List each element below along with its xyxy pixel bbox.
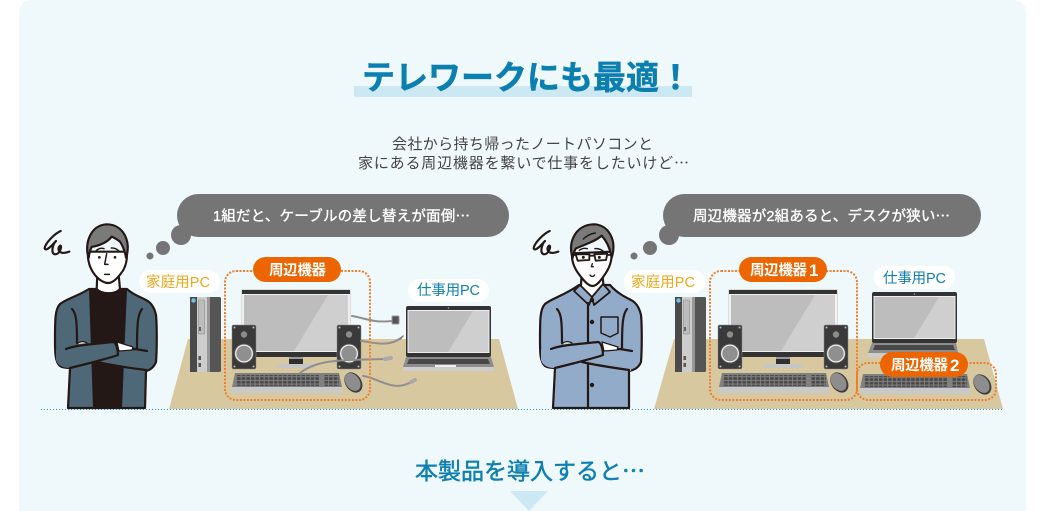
dashed outline: peripherals 1 (710, 271, 857, 400)
crossed arms (56, 309, 147, 371)
arrow: down (510, 491, 548, 511)
label: work PC right: 仕事用PC (883, 270, 946, 287)
collar (574, 284, 610, 305)
label: home PC right: 家庭用PC (631, 274, 695, 291)
dashed outline: peripherals 2 (857, 363, 996, 400)
label: work PC left (408, 279, 489, 302)
label: peripherals (253, 257, 341, 282)
desk: right (654, 339, 1003, 409)
buttons (590, 298, 594, 387)
title: テレワークにも最適！ (362, 59, 692, 96)
label: peripherals 2 (880, 352, 968, 377)
label: peripherals 2: 2 (950, 356, 959, 375)
monitor (728, 289, 838, 368)
laptop: left (403, 306, 494, 371)
speakers (718, 325, 742, 369)
keyboard (232, 373, 342, 393)
speakers (232, 325, 256, 369)
peripherals group 1: right (718, 289, 852, 396)
inner shirt (89, 289, 127, 408)
thought bubble: right (630, 194, 981, 260)
worry scribble (45, 231, 69, 254)
floor line (41, 408, 1003, 410)
label: peripherals 1 (739, 257, 827, 282)
peripherals group: left (232, 289, 366, 396)
thought bubble: left (146, 194, 509, 260)
mouse (340, 369, 366, 396)
label: peripherals 2: 周辺機器 (891, 357, 948, 374)
neck and head (87, 224, 128, 293)
keyboard (860, 374, 970, 394)
desk: left (169, 339, 518, 409)
label: home PC left (139, 270, 220, 293)
label: work PC left: 仕事用PC (417, 282, 480, 299)
placket (587, 303, 589, 408)
label: peripherals 1: 周辺機器 (750, 262, 808, 279)
intro text: 会社から持ち帰ったノートパソコンと (392, 135, 653, 153)
conclusion text: 本製品を導入すると… (415, 452, 645, 486)
thought bubble: right: 周辺機器が2組あると、デスクが狭い… (693, 205, 950, 226)
jacket (55, 289, 157, 408)
pocket (601, 317, 618, 337)
neck and head (571, 224, 613, 300)
person: left, arms crossed (45, 224, 157, 408)
crossed arms (541, 309, 632, 371)
thought bubble: left: 1組だと、ケーブルの差し替えが面倒… (213, 205, 470, 226)
peripherals group 2: right (860, 371, 995, 398)
label: work PC right (874, 266, 955, 289)
tower PC: right (675, 297, 706, 372)
tower PC: left (190, 297, 221, 372)
label: home PC left: 家庭用PC (146, 274, 210, 291)
mouse (826, 369, 852, 396)
person: right, glasses and shirt (534, 224, 642, 408)
intro text (358, 135, 689, 173)
worry scribble (534, 231, 558, 254)
monitor (241, 289, 351, 368)
label: home PC right (624, 270, 705, 293)
label: peripherals: 周辺機器 (269, 262, 326, 279)
dashed outline: peripherals left (225, 271, 370, 400)
laptop: right (868, 292, 958, 357)
mouse (969, 371, 995, 398)
intro text: 家にある周辺機器を繋いで仕事をしたいけど… (358, 152, 689, 173)
label: peripherals 1: 1 (809, 261, 818, 280)
cables: left (300, 316, 415, 386)
shirt (540, 285, 642, 408)
keyboard (719, 373, 829, 393)
